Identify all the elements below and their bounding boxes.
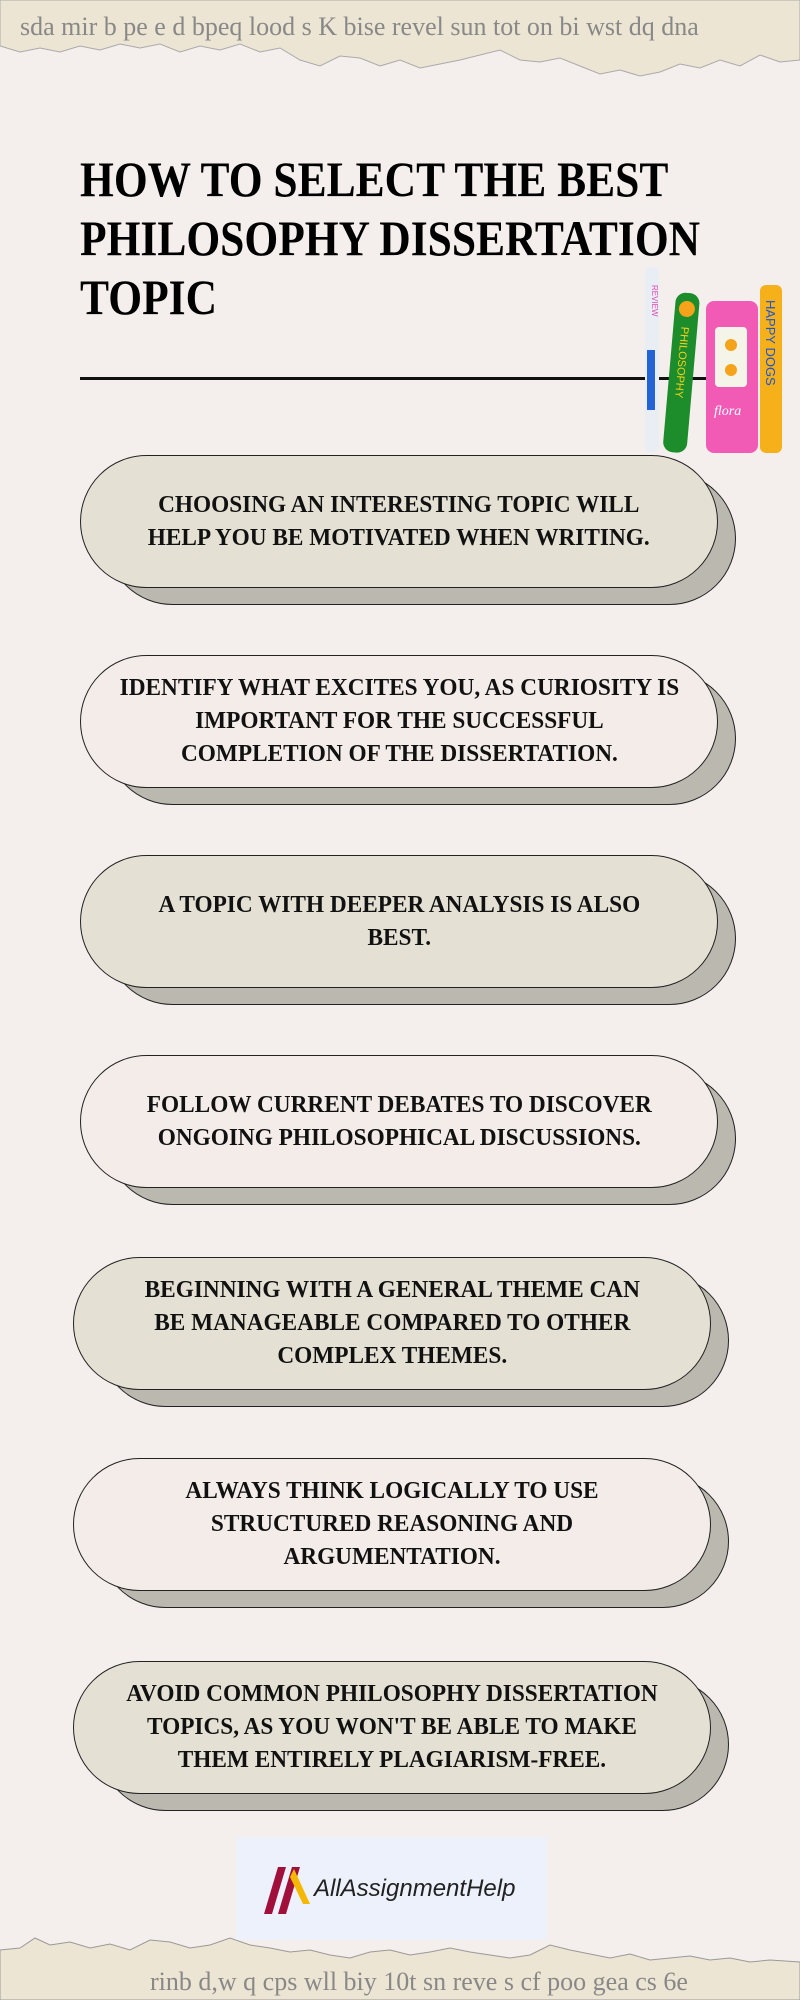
panel 4: FOLLOW CURRENT DEBATES TO DISCOVER bbox=[147, 1092, 651, 1118]
panel 7: THEM ENTIRELY PLAGIARISM-FREE. bbox=[178, 1747, 606, 1773]
title: HOW TO SELECT THE BEST bbox=[80, 151, 668, 207]
panel 7 bbox=[73, 1661, 729, 1811]
title: PHILOSOPHY DISSERTATION bbox=[80, 210, 700, 266]
torn paper bottom: rinb d,w q cps wll biy 10t sn reve s cf poo gea cs 6e bbox=[150, 1967, 688, 1996]
panel 7: AVOID COMMON PHILOSOPHY DISSERTATION bbox=[126, 1681, 658, 1707]
icon: books bbox=[645, 267, 782, 453]
logo bbox=[236, 1837, 547, 1940]
panel 3 bbox=[80, 855, 736, 1005]
panel 1 bbox=[80, 455, 736, 605]
panel 5: BE MANAGEABLE COMPARED TO OTHER bbox=[154, 1310, 630, 1336]
panel 6: ALWAYS THINK LOGICALLY TO USE bbox=[185, 1478, 599, 1504]
icon: logo mark bbox=[264, 1867, 310, 1914]
icon: books: flora bbox=[714, 404, 741, 419]
logo: AllAssignmentHelp bbox=[314, 1874, 515, 1902]
title bbox=[80, 151, 700, 325]
panel 5 bbox=[73, 1257, 729, 1407]
icon: books: PHILOSOPHY bbox=[672, 326, 690, 399]
panel 5: BEGINNING WITH A GENERAL THEME CAN bbox=[144, 1277, 640, 1303]
panel 5: COMPLEX THEMES. bbox=[277, 1343, 507, 1369]
panel 7: TOPICS, AS YOU WON'T BE ABLE TO MAKE bbox=[147, 1714, 637, 1740]
panel 1: HELP YOU BE MOTIVATED WHEN WRITING. bbox=[148, 524, 650, 550]
title: TOPIC bbox=[80, 269, 217, 325]
panel 1: CHOOSING AN INTERESTING TOPIC WILL bbox=[158, 492, 640, 518]
panel 2 bbox=[80, 655, 736, 805]
panel 6: STRUCTURED REASONING AND bbox=[211, 1511, 573, 1537]
icon: books: REVIEW bbox=[650, 285, 659, 317]
torn paper top: sda mir b pe e d bpeq lood s K bise revel sun tot on bi wst dq dna bbox=[20, 12, 699, 41]
panel 3: BEST. bbox=[367, 924, 431, 950]
panel 4: ONGOING PHILOSOPHICAL DISCUSSIONS. bbox=[157, 1124, 641, 1150]
panel 2: IMPORTANT FOR THE SUCCESSFUL bbox=[195, 708, 603, 734]
torn paper top bbox=[0, 0, 800, 76]
torn paper bottom bbox=[0, 1938, 800, 2000]
panel 3: A TOPIC WITH DEEPER ANALYSIS IS ALSO bbox=[158, 892, 640, 918]
panel 2: IDENTIFY WHAT EXCITES YOU, AS CURIOSITY IS bbox=[119, 675, 679, 701]
panel 2: COMPLETION OF THE DISSERTATION. bbox=[181, 741, 617, 767]
panel 4 bbox=[80, 1055, 736, 1205]
panel 6 bbox=[73, 1458, 729, 1608]
divider line bbox=[80, 377, 706, 380]
panel 6: ARGUMENTATION. bbox=[283, 1544, 501, 1570]
icon: books: HAPPY DOGS bbox=[763, 300, 778, 386]
